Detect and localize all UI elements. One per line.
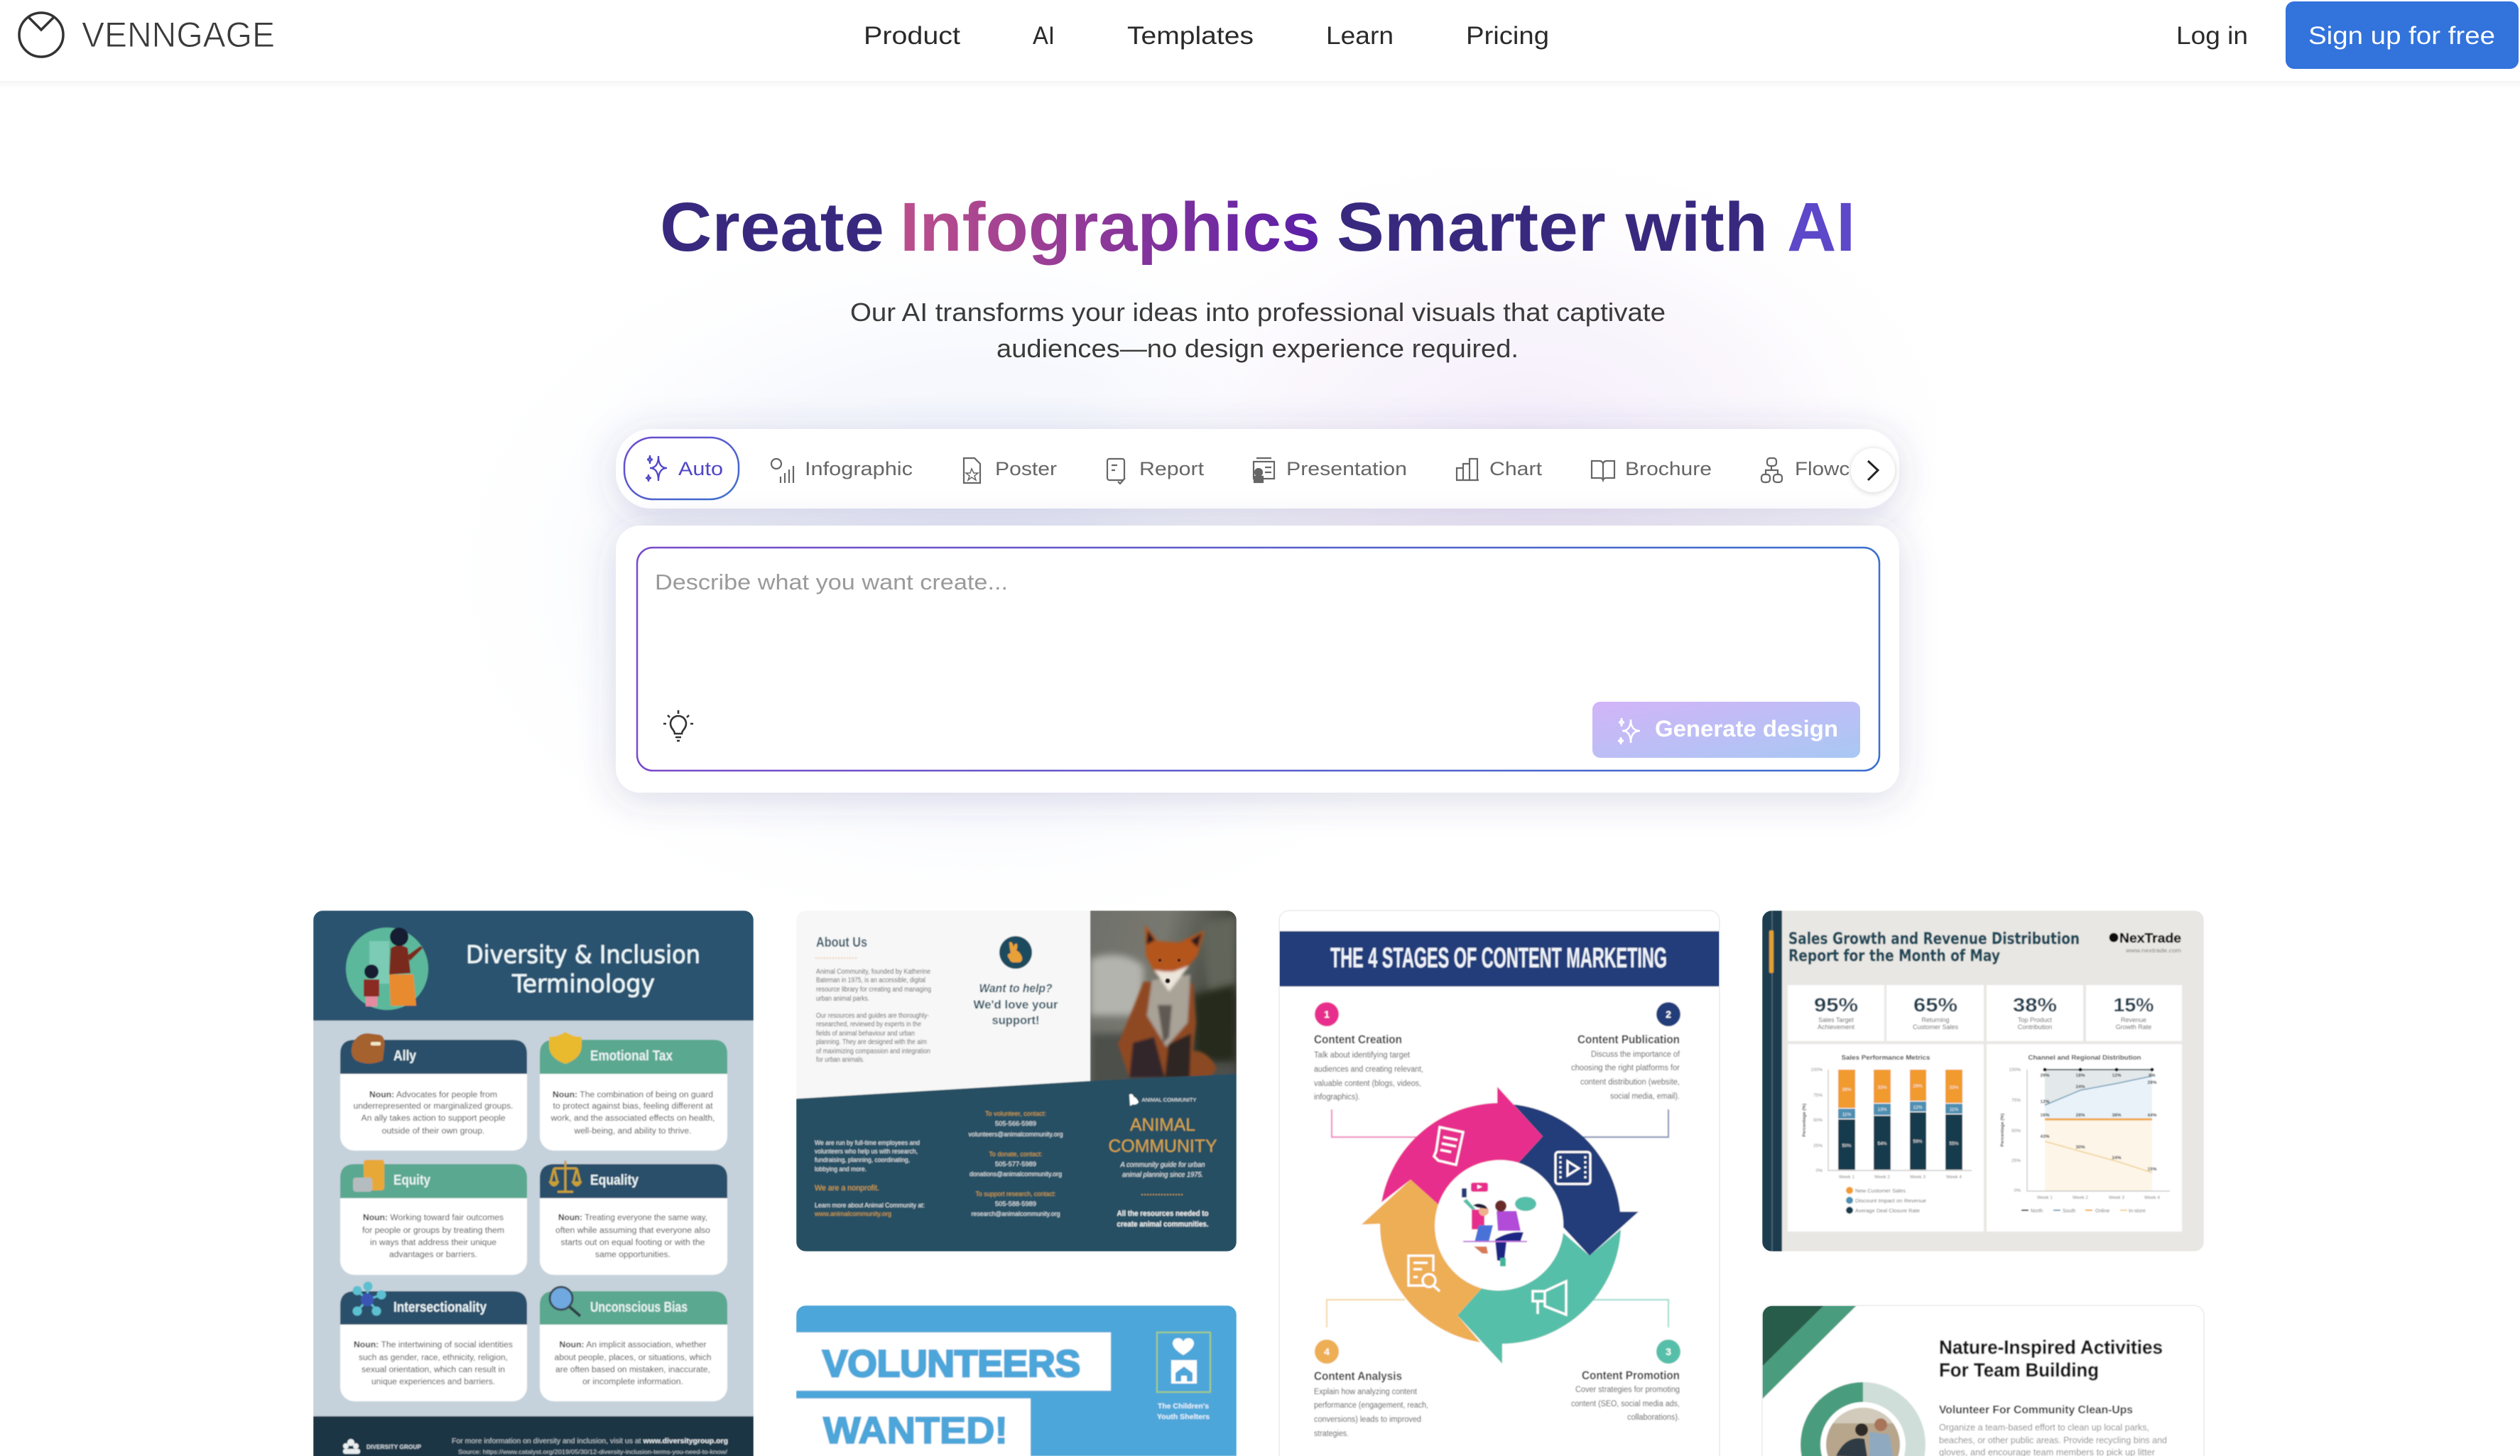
chart: Channel and Regional Distribution lines: 29%: [2040, 1073, 2050, 1078]
step 4: Content Analysis: conversions) leads to improved: [1314, 1416, 1421, 1424]
KPI: 95%: 95%: [1814, 994, 1858, 1016]
chart: Sales Performance Metrics stacked bars: 13%: [1877, 1107, 1887, 1112]
nonprofit text: www.animalcommunity.org: [814, 1210, 891, 1218]
tab: Presentation: [1254, 458, 1407, 482]
nav link: Templates: Templates: [1127, 22, 1254, 50]
step 2: Content Publication: choosing the right platforms for: [1571, 1064, 1680, 1072]
headline band: Wanted: [796, 1398, 1031, 1456]
KPI: 15%: Growth Rate: [2116, 1023, 2151, 1031]
about us heading: About Us: [816, 935, 867, 950]
term card: Emotional Tax: work, and the associated effects on health,: [550, 1114, 715, 1123]
card outlines: [1279, 911, 2204, 1456]
brochure cover text: ANIMAL COMMUNITY: [1142, 1097, 1196, 1103]
chart: Channel and Regional Distribution lines: 25%: [2011, 1158, 2021, 1163]
chart: Sales Performance Metrics stacked bars: 59%: [1913, 1139, 1923, 1144]
term card: Equality: often while assuming that everyone also: [555, 1227, 710, 1235]
nonprofit text: [814, 1139, 925, 1218]
tab: Poster: Poster: [995, 458, 1057, 479]
chart: Sales Performance Metrics stacked bars: Percentage (%): [1802, 1104, 1807, 1136]
about us body text: Animal Community, founded by Katherine: [816, 968, 930, 976]
corner stripes: [1762, 1305, 1857, 1399]
KPI: 38%: Contribution: [2018, 1023, 2052, 1031]
step 1: Content Creation: Content Creation: [1314, 1033, 1402, 1046]
term card: Equity: advantages or barriers.: [389, 1251, 477, 1259]
chart: Sales Performance Metrics stacked bars: Sales Performance Metrics: [1841, 1054, 1930, 1061]
about us body text: Bateman in 1975, is an accessible, digital: [816, 977, 925, 984]
term card: Equality: Equality: [590, 1173, 639, 1188]
panel: prompt card: [616, 526, 1899, 793]
help call to action: Want to help?: [979, 982, 1053, 995]
contact details: donations@animalcommunity.org: [970, 1170, 1062, 1178]
headline band: Wanted: WANTED!: [823, 1410, 1008, 1452]
nav link: Learn: Learn: [1326, 22, 1394, 50]
chart: Channel and Regional Distribution lines: Channel and Regional Distribution: [2029, 1054, 2141, 1061]
prompt placeholder: Describe what you want create...: [655, 570, 1008, 594]
contact details: 505-588-5989: [995, 1200, 1036, 1207]
chart: Channel and Regional Distribution lines: 28%: [2147, 1080, 2157, 1085]
background glow: blue: [213, 71, 1634, 1136]
nonprofit text: We are a nonprofit.: [815, 1184, 879, 1192]
shelter name: [1157, 1403, 1210, 1421]
icon: rabbit badge: [999, 936, 1032, 969]
chart: Channel and Regional Distribution lines: In-store: [2129, 1209, 2146, 1214]
term card: Intersectionality: Noun: The intertwining of social identities: [354, 1341, 513, 1349]
nonprofit text: lobbying and more.: [815, 1166, 867, 1173]
chart: Sales Performance Metrics stacked bars: 100%: [1810, 1067, 1823, 1072]
term card: Intersectionality: sexual orientation, which can result in: [362, 1366, 505, 1374]
chart: Sales Performance Metrics stacked bars: 50%: [1813, 1118, 1823, 1123]
contact details: To support research, contact:: [976, 1190, 1055, 1197]
photo: fox: [1090, 911, 1237, 1087]
chart: Sales Performance Metrics stacked bars: Week 3: [1910, 1175, 1926, 1180]
brochure cover text: animal planning since 1975.: [1122, 1170, 1203, 1179]
chart: Sales Performance Metrics stacked bars: 33%: [1949, 1085, 1959, 1090]
help call to action: We'd love your: [973, 998, 1058, 1011]
chart: Sales Performance Metrics stacked bars: Week 1: [1839, 1175, 1854, 1180]
term card: Unconscious Bias: are often based on mistaken, inaccurate,: [555, 1366, 710, 1374]
nav link: Log in: Log in: [2176, 22, 2248, 50]
step 2: Content Publication: Discuss the importance of: [1591, 1050, 1680, 1059]
NexTrade logo: NexTrade: [2119, 931, 2181, 945]
chart: Sales Performance Metrics stacked bars: 54%: [1877, 1141, 1887, 1146]
poster heading: Diversity & Inclusion: [466, 941, 700, 969]
about us body text: researched, reviewed by experts in the: [816, 1021, 921, 1028]
button: Generate design: Generate design: [1655, 716, 1838, 741]
step 1: Content Creation: audiences and creating relevant,: [1314, 1065, 1423, 1074]
about us body text: resource library for creating and managing: [816, 986, 931, 994]
button: Sign up for free: Sign up for free: [2308, 22, 2495, 50]
brochure cover text: COMMUNITY: [1108, 1136, 1217, 1156]
template card: 4 Stages of Content Marketing: [1279, 911, 1720, 1456]
term card: Unconscious Bias: about people, places, or situations, which: [554, 1354, 712, 1362]
template card: Sales Growth report: [1762, 911, 2204, 1251]
chart: Channel and Regional Distribution lines: 12%: [2112, 1073, 2122, 1078]
nav link: AI: AI: [1033, 22, 1055, 50]
chart: Sales Performance Metrics stacked bars: Week 2: [1874, 1175, 1890, 1180]
step 3: Content Promotion: 3: [1666, 1346, 1671, 1357]
contact details: volunteers@animalcommunity.org: [969, 1131, 1063, 1138]
term card: Ally: Noun: Advocates for people from: [369, 1091, 497, 1099]
KPI: 65%: Customer Sales: [1913, 1023, 1959, 1031]
step 4: Content Analysis: 4: [1324, 1346, 1330, 1357]
step 1: Content Creation: Talk about identifying target: [1314, 1051, 1411, 1060]
tab: Infographic: Infographic: [805, 458, 913, 479]
poster footer: Source: https://www.catalyst.org/2019/05/30/12-diversity-inclusion-terms-you-need-to-know/: [458, 1448, 728, 1455]
button: Sign up for free: [2286, 1, 2519, 69]
brochure dark lower panel: [796, 1074, 1237, 1251]
term card: Equity: Noun: Working toward fair outcomes: [363, 1214, 504, 1222]
term card: Ally: underrepresented or marginalized groups.: [354, 1102, 513, 1111]
activity text: [1939, 1422, 2167, 1456]
chart: Channel and Regional Distribution lines: Week 3: [2109, 1195, 2124, 1200]
step 4: Content Analysis: [1314, 1340, 1428, 1438]
nav link: Pricing: Pricing: [1466, 22, 1549, 50]
report title: [1788, 930, 2080, 965]
tab: Brochure: Brochure: [1625, 458, 1712, 479]
subtitle: [850, 298, 1666, 363]
poster heading: [1939, 1337, 2163, 1381]
poster heading: Nature-Inspired Activities: [1939, 1337, 2163, 1358]
term card: Emotional Tax: to protect against bias, feeling different at: [553, 1102, 713, 1111]
chart: Channel and Regional Distribution lines: 24%: [2075, 1085, 2085, 1090]
brochure cover text: create animal communities.: [1117, 1220, 1209, 1229]
KPI: 95%: [1788, 985, 1884, 1041]
step 3: Content Promotion: [1571, 1340, 1680, 1422]
term card: Ally: outside of their own group.: [382, 1127, 484, 1136]
chart: Sales Performance Metrics stacked bars: 0%: [1816, 1168, 1823, 1173]
illustration: parent and child: [346, 928, 428, 1010]
chart: Channel and Regional Distribution lines: Online: [2095, 1209, 2109, 1214]
panel: design type tabs: [616, 429, 1899, 509]
chart: Channel and Regional Distribution lines: 18%: [2075, 1073, 2085, 1078]
tab: Report: [1107, 458, 1205, 484]
contact details: 505-566-5989: [995, 1120, 1036, 1127]
chart: Channel and Regional Distribution lines: 43%: [2040, 1134, 2050, 1139]
background glow: pink: [852, 71, 2202, 1065]
title: Create: [660, 188, 884, 266]
chart: Channel and Regional Distribution lines: 44%: [2147, 1113, 2157, 1118]
chart: Channel and Regional Distribution lines: 0%: [2014, 1188, 2021, 1193]
KPI: 38%: 38%: [2013, 994, 2057, 1016]
KPI: 15%: Revenue: [2121, 1016, 2146, 1023]
step 1: Content Creation: [1314, 1002, 1423, 1102]
tab: Chart: [1456, 458, 1543, 480]
chart: Channel and Regional Distribution lines: 16%: [2040, 1113, 2050, 1118]
banner heading: [1279, 931, 1720, 987]
term card: Unconscious Bias: Noun: An implicit association, whether: [560, 1341, 707, 1349]
term card: Ally: Ally: [393, 1048, 417, 1064]
step 3: Content Promotion: Content Promotion: [1582, 1369, 1680, 1382]
step 2: Content Publication: [1571, 1002, 1680, 1101]
contact details: To volunteer, contact:: [985, 1110, 1046, 1117]
step 4: Content Analysis: performance (engagement, reach,: [1314, 1401, 1428, 1410]
chart: Sales Performance Metrics stacked bars: 75%: [1813, 1093, 1823, 1098]
chart: Channel and Regional Distribution lines: 38%: [2112, 1113, 2122, 1118]
activity subheading: Volunteer For Community Clean-Ups: [1939, 1404, 2133, 1416]
term card: Emotional Tax: Emotional Tax: [590, 1048, 673, 1064]
term card: Intersectionality: Intersectionality: [393, 1300, 487, 1315]
term card: Ally: [340, 1033, 527, 1151]
chart: Channel and Regional Distribution lines: 28%: [2075, 1113, 2085, 1118]
shelter name: Youth Shelters: [1157, 1413, 1210, 1421]
term card: Equality: Noun: Treating everyone the same way,: [558, 1214, 707, 1222]
button: Generate design: [1592, 702, 1860, 758]
term card: Unconscious Bias: or incomplete information.: [582, 1378, 683, 1386]
term card: Ally: An ally takes action to support people: [361, 1114, 506, 1123]
chart: Sales Performance Metrics stacked bars: Average Deal Closure Rate: [1855, 1209, 1920, 1214]
step 3: Content Promotion: collaborations).: [1627, 1413, 1680, 1422]
chart: Channel and Regional Distribution lines: 75%: [2011, 1098, 2021, 1103]
term card: Emotional Tax: Noun: The combination of being on guard: [553, 1091, 713, 1099]
term card: Equity: for people or groups by treating them: [362, 1227, 504, 1235]
step 1: Content Creation: infographics).: [1314, 1093, 1360, 1102]
icon: megaphone: [1533, 1281, 1566, 1315]
report title: Report for the Month of May: [1788, 947, 2000, 965]
nav link: Product: Product: [864, 22, 960, 50]
tab: Report: Report: [1139, 458, 1205, 479]
help call to action: support!: [992, 1014, 1040, 1027]
tab: Brochure: [1592, 458, 1712, 480]
chart: Channel and Regional Distribution lines: Percentage (%): [2000, 1114, 2005, 1146]
term card: Emotional Tax: [540, 1032, 727, 1151]
chart: Sales Performance Metrics stacked bars: 11%: [1842, 1112, 1851, 1117]
about us body text: of maximizing compassion and integration: [816, 1048, 930, 1055]
chart: Channel and Regional Distribution lines: 15%: [2147, 1167, 2157, 1172]
icon: video: [1555, 1152, 1590, 1184]
term card: Equality: starts out on equal footing or with the: [561, 1239, 705, 1247]
about us body text: for urban animals.: [816, 1056, 864, 1064]
navigation bar: [0, 0, 2520, 91]
segment: promotion (teal): [1457, 1229, 1621, 1364]
poster footer: DIVERSITY GROUP: [366, 1443, 421, 1450]
left stripe with accent: [1762, 911, 1782, 1251]
subtitle: Our AI transforms your ideas into professional visuals that captivate: [850, 298, 1666, 327]
logo wordmark: VENNGAGE: [82, 15, 275, 55]
chart: Sales Performance Metrics stacked bars: 25%: [1813, 1143, 1823, 1148]
brochure cover text: All the resources needed to: [1117, 1210, 1209, 1218]
tab: Flowchart (clipped): [1760, 457, 1850, 483]
chart: Sales Performance Metrics stacked bars: Week 4: [1946, 1175, 1962, 1180]
shelter name: The Children's: [1158, 1403, 1209, 1411]
term card: Equity: [340, 1160, 527, 1275]
NexTrade logo: www.nextrade.com: [2125, 947, 2181, 954]
tab: Infographic: [771, 458, 913, 483]
poster footer: [313, 1416, 754, 1456]
tab: Chart: Chart: [1489, 458, 1543, 479]
segment: analysis (orange): [1362, 1180, 1482, 1342]
step 4: Content Analysis: strategies.: [1314, 1430, 1349, 1438]
tab: Auto (selected): [624, 438, 739, 499]
center circle: [1435, 1161, 1563, 1289]
term card: Unconscious Bias: Unconscious Bias: [590, 1300, 688, 1315]
step 2: Content Publication: social media, email).: [1610, 1092, 1680, 1101]
KPI: 38%: Top Product: [2018, 1016, 2053, 1023]
icon: report search: [1408, 1256, 1440, 1291]
KPI: 65%: [1886, 985, 1984, 1041]
title: AI: [1787, 188, 1855, 266]
template card: Volunteers Wanted poster: [796, 1305, 1237, 1456]
step 1: Content Creation: valuable content (blogs, videos,: [1314, 1080, 1421, 1088]
term card: Equality: same opportunities.: [595, 1251, 670, 1259]
chart: Sales Performance Metrics stacked bars: [1788, 1044, 1984, 1232]
KPI: 38%: [1987, 985, 2083, 1041]
icon: document: [1434, 1127, 1463, 1165]
about us body text: Our resources and guides are thoroughly-: [816, 1012, 929, 1020]
NexTrade logo: [2109, 931, 2181, 954]
chart: Channel and Regional Distribution lines: North: [2031, 1209, 2043, 1214]
template card: Animal Community brochure: [796, 911, 1237, 1251]
nonprofit text: Learn more about Animal Community at:: [815, 1202, 925, 1210]
about us body text: urban animal parks.: [816, 995, 869, 1003]
chart: Channel and Regional Distribution lines: South: [2063, 1209, 2075, 1214]
icon: light bulb: [663, 710, 693, 741]
chart: Channel and Regional Distribution lines: 100%: [2009, 1067, 2021, 1072]
nonprofit text: We are run by full-time employees and: [815, 1139, 920, 1147]
chart: Channel and Regional Distribution lines: Week 1: [2037, 1195, 2053, 1200]
chart: Channel and Regional Distribution lines: 8%: [2149, 1073, 2156, 1078]
segment: creation (pink): [1381, 1087, 1543, 1205]
step 2: Content Publication: Content Publication: [1577, 1033, 1680, 1046]
step 3: Content Promotion: content (SEO, social media ads,: [1571, 1400, 1680, 1408]
KPI: 15%: [2086, 985, 2182, 1041]
activity text: beaches, or other public areas. Provide recycling bins and: [1939, 1435, 2167, 1445]
step 4: Content Analysis: Content Analysis: [1314, 1370, 1402, 1383]
tab: Presentation: Presentation: [1286, 458, 1407, 479]
button: next tabs arrow: [1851, 448, 1895, 492]
chart: Sales Performance Metrics stacked bars: New Customer Sales: [1855, 1189, 1906, 1194]
icon: Venngage logo mark: [19, 13, 63, 57]
about us body text: fields of animal behaviour and urban: [816, 1030, 915, 1038]
KPI: 65%: Returning: [1921, 1016, 1950, 1023]
term card: Intersectionality: unique experiences and barriers.: [371, 1378, 495, 1386]
chart: Sales Performance Metrics stacked bars: 55%: [1949, 1141, 1959, 1146]
step 3: Content Promotion: Cover strategies for promoting: [1575, 1386, 1680, 1394]
chart: Sales Performance Metrics stacked bars: 33%: [1877, 1085, 1887, 1090]
step 1: Content Creation: 1: [1324, 1009, 1330, 1020]
chart: Sales Performance Metrics stacked bars: Discount Impact on Revenue: [1855, 1199, 1926, 1204]
term card: Emotional Tax: well-being, and ability to thrive.: [573, 1127, 692, 1136]
activity text: Organize a team-based effort to clean up local parks,: [1939, 1422, 2149, 1433]
chart: Channel and Regional Distribution lines: 12%: [2040, 1099, 2050, 1104]
banner heading: THE 4 STAGES OF CONTENT MARKETING: [1330, 942, 1667, 974]
title: Smarter with: [1337, 188, 1768, 266]
template card: Nature-Inspired Activities: [1762, 1305, 2204, 1456]
template card: Diversity & Inclusion Terminology: [313, 911, 754, 1456]
illustration: two people with phone: [1462, 1183, 1536, 1266]
term card: Equity: in ways that address their unique: [370, 1239, 496, 1247]
poster heading: [466, 941, 700, 999]
about us body text: [816, 968, 931, 1064]
term card: Intersectionality: [340, 1283, 527, 1401]
segment: publication (navy): [1514, 1104, 1639, 1256]
poster footer: For more information on diversity and inclusion, visit us at www.diversitygroup.org: [452, 1438, 728, 1445]
tab: Flowchart (clipped): Flowchart: [1795, 458, 1886, 479]
tab: Auto (selected): Auto: [678, 458, 723, 479]
term card: Unconscious Bias: [540, 1287, 727, 1401]
headline band: Volunteers: [796, 1332, 1111, 1391]
term card: Equity: Equity: [393, 1173, 431, 1188]
report title: Sales Growth and Revenue Distribution: [1788, 930, 2080, 948]
headline band: Volunteers: VOLUNTEERS: [822, 1343, 1080, 1385]
chart: Channel and Regional Distribution lines: 30%: [2075, 1145, 2085, 1150]
step 2: Content Publication: 2: [1666, 1009, 1671, 1020]
chart: Channel and Regional Distribution lines: 50%: [2011, 1129, 2021, 1134]
term card: Intersectionality: such as gender, race, ethnicity, religion,: [359, 1354, 508, 1362]
contact details: research@animalcommunity.org: [972, 1210, 1060, 1217]
chart: Sales Performance Metrics stacked bars: 12%: [1913, 1105, 1923, 1110]
KPI: 15%: 15%: [2114, 994, 2154, 1016]
chart: Channel and Regional Distribution lines: 24%: [2112, 1156, 2122, 1161]
prompt text box: [637, 548, 1879, 771]
poster heading: For Team Building: [1939, 1359, 2099, 1381]
poster heading: Terminology: [511, 970, 655, 999]
KPI: 65%: 65%: [1913, 994, 1957, 1016]
nonprofit text: fundraising, planning, coordinating,: [815, 1156, 910, 1164]
tab: Poster: [964, 458, 1057, 483]
contact details: To donate, contact:: [989, 1151, 1043, 1158]
KPI: 95%: Sales Target: [1818, 1016, 1854, 1023]
term card: Equality: [540, 1161, 727, 1275]
help call to action: [973, 982, 1058, 1027]
brochure cover text: [1108, 1094, 1217, 1229]
chart: Sales Performance Metrics stacked bars: 38%: [1842, 1087, 1852, 1092]
chart: Sales Performance Metrics stacked bars: 29%: [1913, 1084, 1923, 1089]
header band: [313, 911, 754, 1021]
title: Infographics: [900, 188, 1320, 266]
contact details: [969, 1110, 1063, 1217]
chart: Channel and Regional Distribution lines: Week 2: [2073, 1195, 2088, 1200]
brochure cover text: ANIMAL: [1130, 1115, 1195, 1135]
step 2: Content Publication: content distribution (website,: [1580, 1078, 1680, 1087]
connector lines: [1327, 1109, 1668, 1327]
KPI: 95%: Achievement: [1818, 1023, 1855, 1031]
contact details: 505-577-5989: [995, 1161, 1036, 1168]
subtitle: audiences—no design experience required.: [996, 334, 1519, 363]
icon: shelter logo: [1157, 1332, 1210, 1392]
about us body text: planning. They are designed with the aim: [816, 1038, 927, 1046]
chart: Channel and Regional Distribution lines: Week 4: [2144, 1195, 2160, 1200]
brochure cover text: A community guide for urban: [1120, 1161, 1205, 1169]
step 4: Content Analysis: Explain how analyzing content: [1314, 1388, 1418, 1396]
cycle diagram: [1362, 1087, 1639, 1364]
chart: Channel and Regional Distribution lines: [1987, 1044, 2182, 1232]
chart: Sales Performance Metrics stacked bars: 11%: [1950, 1107, 1958, 1112]
donut with photo: [1801, 1382, 1926, 1456]
nonprofit text: volunteers who help us with research,: [815, 1148, 918, 1156]
chart: Sales Performance Metrics stacked bars: 50%: [1842, 1143, 1852, 1148]
